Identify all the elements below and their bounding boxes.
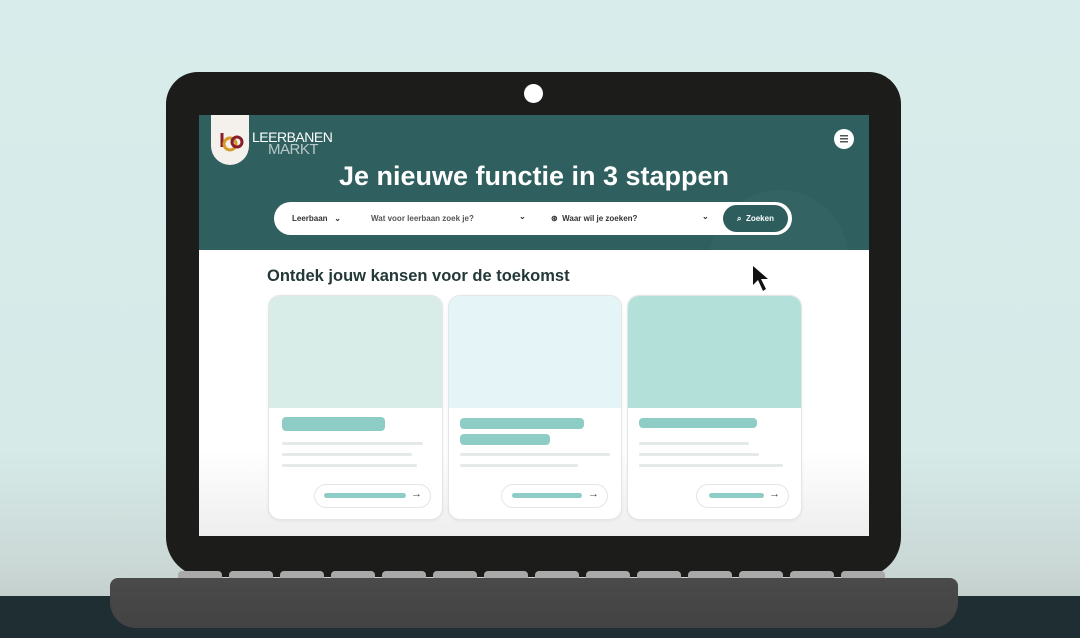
search button	[723, 205, 788, 232]
card 2: →	[588, 488, 599, 500]
search button: ⌕ Zoeken	[737, 214, 774, 223]
search bar: Leerbaan ⌄	[292, 214, 341, 223]
header banner	[199, 115, 869, 250]
logo	[211, 115, 249, 165]
search bar: ⌄	[519, 212, 526, 221]
title: Je nieuwe functie in 3 stappen	[339, 161, 729, 191]
logo text	[252, 129, 332, 158]
floor	[0, 596, 1080, 638]
card 1: →	[411, 488, 422, 500]
search bar: ⌄	[702, 212, 709, 221]
card 2	[448, 295, 622, 520]
screen	[199, 115, 869, 536]
laptop base	[110, 578, 958, 628]
card 3: →	[769, 488, 780, 500]
card 3	[627, 295, 802, 520]
laptop lid	[166, 72, 901, 577]
section heading: Ontdek jouw kansen voor de toekomst	[267, 267, 570, 285]
logo text: LEERBANEN	[252, 129, 332, 145]
webcam	[524, 84, 543, 103]
logo text: MARKT	[268, 141, 318, 158]
search bar	[274, 202, 792, 235]
search bar: Wat voor leerbaan zoek je?	[371, 214, 474, 223]
menu icon	[834, 129, 854, 149]
cursor	[753, 266, 768, 291]
card 1	[268, 295, 443, 520]
keyboard keys	[178, 571, 885, 578]
search bar: ⊛ Waar wil je zoeken?	[551, 214, 637, 223]
